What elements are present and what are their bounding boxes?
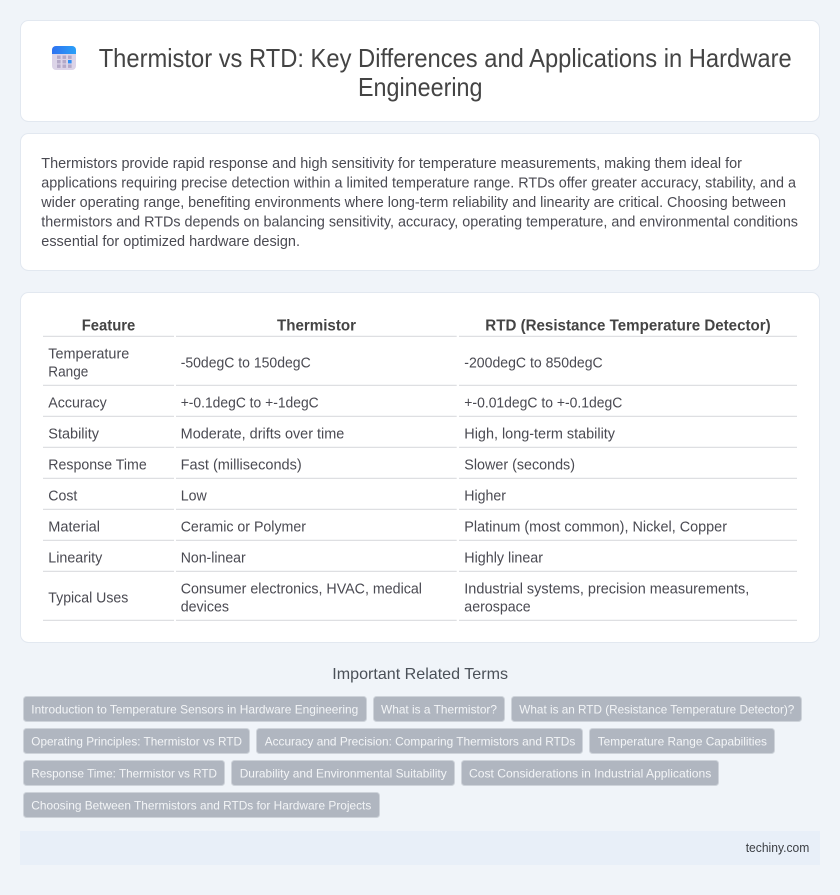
row: accuracy xyxy=(43,395,797,416)
row: material: Platinum (most common), Nickel, Copper xyxy=(464,519,727,535)
row: cost: Low xyxy=(181,488,207,504)
tag: choosing between: Choosing Between Thermistors and RTDs for Hardware Projects xyxy=(31,798,371,812)
row: accuracy: +-0.1degC to +-1degC xyxy=(181,395,319,411)
row: typical uses xyxy=(43,581,797,620)
row: typical uses: Consumer electronics, HVAC, medical xyxy=(181,581,422,597)
panel: header xyxy=(20,20,820,122)
tag: accuracy and precision xyxy=(256,728,582,754)
text block: summary paragraph: essential for optimized hardware design. xyxy=(41,234,300,250)
row: response time: Slower (seconds) xyxy=(464,457,575,473)
tag: accuracy and precision: Accuracy and Precision: Comparing Thermistors and RTDs xyxy=(265,734,575,748)
row: cost: Cost xyxy=(48,488,77,504)
tag: cost considerations: Cost Considerations in Industrial Applications xyxy=(469,766,711,780)
tag: cost considerations xyxy=(462,760,718,786)
row: stability: High, long-term stability xyxy=(464,426,616,442)
row: linearity: Non-linear xyxy=(181,550,246,566)
tag: what is a thermistor: What is a Thermistor? xyxy=(381,702,497,716)
title: Engineering xyxy=(358,74,482,102)
tag: what is an rtd: What is an RTD (Resistance Temperature Detector)? xyxy=(519,702,795,716)
tag: introduction xyxy=(24,696,366,722)
tag: temperature range xyxy=(590,728,774,754)
heading: important related terms: Important Related Terms xyxy=(332,666,508,683)
row: cost: Higher xyxy=(464,488,506,504)
tag: choosing between xyxy=(24,792,380,818)
row: stability: Moderate, drifts over time xyxy=(181,426,344,442)
row: linearity xyxy=(43,550,797,571)
tag: what is a thermistor xyxy=(374,696,504,722)
table header row: RTD (Resistance Temperature Detector) xyxy=(485,318,771,335)
tag: durability: Durability and Environmental Suitability xyxy=(240,766,447,780)
tag: durability xyxy=(232,760,454,786)
row: typical uses: Typical Uses xyxy=(48,590,128,606)
row: response time: Response Time xyxy=(48,457,147,473)
row: material: Material xyxy=(48,519,100,535)
row: linearity: Linearity xyxy=(48,550,103,566)
row: temperature range: Temperature xyxy=(48,346,129,362)
row: temperature range xyxy=(43,346,797,385)
row: material: Ceramic or Polymer xyxy=(181,519,306,535)
title: Thermistor vs RTD: Key Differences and Applications in Hardware xyxy=(99,45,792,73)
footer: techiny.com xyxy=(746,840,809,855)
text block: summary paragraph: wider operating range, benefiting environments where long-term reliability and linearity are critical. Choosing between xyxy=(40,195,786,211)
row: stability: Stability xyxy=(48,426,100,442)
panel: comparison table xyxy=(20,292,820,642)
footer xyxy=(20,831,820,865)
panel: introduction xyxy=(20,134,820,270)
row: stability xyxy=(43,426,797,447)
row: accuracy: +-0.01degC to +-0.1degC xyxy=(464,395,622,411)
row: temperature range: -200degC to 850degC xyxy=(464,355,603,371)
tag: response time: Response Time: Thermistor vs RTD xyxy=(31,766,217,780)
row: temperature range: Range xyxy=(48,364,88,380)
tag: temperature range: Temperature Range Capabilities xyxy=(598,734,767,748)
row: linearity: Highly linear xyxy=(464,550,543,566)
table header row: Feature xyxy=(82,318,135,335)
row: accuracy: Accuracy xyxy=(48,395,107,411)
text block: summary paragraph: Thermistors provide rapid response and high sensitivity for temperature measurements, making them ideal for xyxy=(41,156,742,172)
row: response time: Fast (milliseconds) xyxy=(181,457,302,473)
tag: what is an rtd xyxy=(512,696,802,722)
tag: operating principles xyxy=(24,728,250,754)
table header row xyxy=(43,318,797,336)
panel: related term tags xyxy=(24,696,802,818)
table header row: Thermistor xyxy=(277,318,356,335)
row: material xyxy=(43,519,797,540)
row: typical uses: devices xyxy=(181,599,229,615)
row: temperature range: -50degC to 150degC xyxy=(181,355,311,371)
text block: summary paragraph: thermistors and RTDs depends on balancing sensitivity, accuracy, operating temperature, and environmental conditions xyxy=(41,214,798,230)
tag: operating principles: Operating Principles: Thermistor vs RTD xyxy=(31,734,242,748)
row: typical uses: Industrial systems, precision measurements, xyxy=(464,581,749,597)
row: cost xyxy=(43,488,797,509)
text block: summary paragraph: applications requiring precise detection within a limited temperature range. RTDs offer greater accuracy, stability, and a xyxy=(41,176,796,192)
tag: response time xyxy=(24,760,224,786)
tag: introduction: Introduction to Temperature Sensors in Hardware Engineering xyxy=(31,702,358,716)
row: typical uses: aerospace xyxy=(464,599,531,615)
icon: calendar xyxy=(52,46,76,70)
title xyxy=(99,45,792,102)
text block: summary paragraph xyxy=(40,156,798,250)
row: response time xyxy=(43,457,797,478)
